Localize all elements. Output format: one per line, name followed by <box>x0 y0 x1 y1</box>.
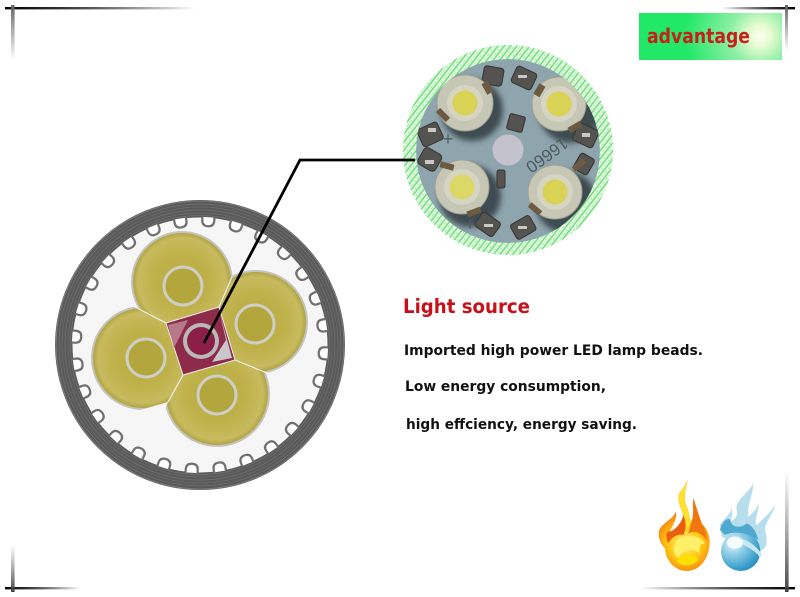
board shadows <box>439 79 601 233</box>
feature line 2: Low energy consumption, <box>405 379 606 395</box>
board printed marks: + <box>465 214 475 234</box>
board printed marks: + <box>443 129 453 149</box>
corner bracket: bottom left <box>5 545 80 592</box>
lamp centre red LED <box>166 307 235 375</box>
lens: right <box>220 270 308 373</box>
LED board close-up <box>403 45 613 255</box>
lens separators <box>135 277 267 402</box>
heading: light source: Light source <box>403 295 530 318</box>
LED lamp front view <box>56 201 344 489</box>
centre mounting hole <box>492 134 524 166</box>
feature line 3: high effciency, energy saving. <box>406 417 637 433</box>
badge: advantage: advantage <box>647 24 750 48</box>
lens: bottom <box>166 360 270 447</box>
lens: left <box>92 307 194 409</box>
corner bracket: top left <box>5 5 195 60</box>
feature line 1: Imported high power LED lamp beads. <box>404 343 703 359</box>
green hatched halo <box>403 45 613 255</box>
badge: advantage <box>639 13 782 60</box>
icon: water ball <box>720 483 775 571</box>
pad highlights <box>425 75 590 229</box>
text block: features <box>404 343 703 433</box>
chip leads <box>436 81 586 217</box>
corner bracket: top right <box>722 5 795 51</box>
board printed marks: 16660 <box>522 133 572 177</box>
lens: top <box>132 232 232 332</box>
circuit board <box>416 59 601 243</box>
lamp white reflector <box>72 218 328 472</box>
board printed marks <box>444 134 568 228</box>
metal solder pads <box>416 65 600 240</box>
corner bracket: bottom right <box>640 470 795 592</box>
icon: fire ball <box>659 480 710 571</box>
LED chips <box>435 75 586 219</box>
lamp metal ring <box>56 201 344 489</box>
connector line <box>204 160 415 343</box>
lamp scalloped loops <box>72 217 328 473</box>
